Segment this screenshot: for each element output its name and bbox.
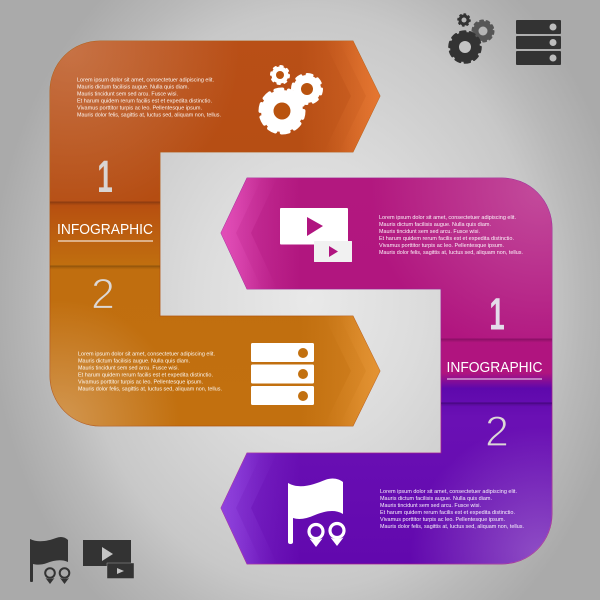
text block: lower orange: Et harum quidem rerum facilis est et expedita distinctio.	[78, 372, 213, 378]
icon: white server stack	[251, 343, 314, 405]
number 1: 1	[97, 151, 113, 202]
icon: dark server stack	[516, 20, 561, 65]
text block: magenta	[379, 215, 523, 256]
icon: dark video screens	[83, 540, 134, 578]
number 1: 1	[489, 289, 505, 339]
text block: lower orange: Lorem ipsum dolor sit amet, consectetuer adipiscing elit.	[78, 352, 215, 358]
text block: lower orange	[78, 352, 222, 392]
ribbon shape	[50, 41, 380, 426]
panel: orange S-shaped ribbon	[50, 41, 380, 426]
ribbon shape	[221, 178, 552, 564]
text block: lower orange: Mauris dictum facilisis augue. Nulla quis diam.	[78, 358, 190, 364]
text block: upper orange: Vivamus porttitor turpis ac leo. Pellentesque ipsum.	[77, 106, 202, 112]
heading underline	[58, 240, 153, 242]
text block: magenta: Mauris tincidunt sem sed arcu. Fusce wisi.	[379, 229, 480, 235]
icon: dark gears	[450, 14, 494, 62]
icon: dark flag and map pins	[30, 537, 69, 584]
heading underline	[447, 378, 542, 380]
heading: INFOGRAPHIC	[57, 221, 153, 238]
lower arrow chevrons	[221, 453, 300, 564]
text block: lower orange: Vivamus porttitor turpis ac leo. Pellentesque ipsum.	[78, 380, 203, 386]
fold dividers	[50, 202, 160, 270]
text block: purple: Vivamus porttitor turpis ac leo. Pellentesque ipsum.	[380, 517, 505, 523]
icon: white gears	[260, 66, 322, 132]
number 2: 2	[485, 408, 509, 456]
panel: magenta and purple S-shaped ribbon	[221, 178, 552, 564]
text block: magenta: Mauris dictum facilisis augue. Nulla quis diam.	[379, 222, 491, 228]
text block: upper orange: Mauris dictum facilisis augue. Nulla quis diam.	[77, 84, 189, 90]
heading: INFOGRAPHIC	[446, 359, 543, 376]
text block: lower orange: Mauris tincidunt sem sed arcu. Fusce wisi.	[78, 366, 179, 372]
text block: upper orange: Et harum quidem rerum facilis est et expedita distinctio.	[77, 98, 212, 104]
text block: purple	[380, 489, 524, 530]
text block: purple: Lorem ipsum dolor sit amet, consectetuer adipiscing elit.	[380, 489, 517, 495]
icon: white video screens	[280, 208, 352, 262]
text block: purple: Et harum quidem rerum facilis est et expedita distinctio.	[380, 510, 515, 516]
upper arrow chevrons	[300, 41, 380, 152]
text block: upper orange	[77, 78, 221, 118]
icon: white flag and map pins	[288, 479, 344, 547]
fold dividers	[441, 338, 552, 406]
lower arrow chevrons	[300, 316, 380, 426]
text block: purple: Mauris tincidunt sem sed arcu. Fusce wisi.	[380, 503, 481, 509]
text block: upper orange: Mauris tincidunt sem sed arcu. Fusce wisi.	[77, 92, 178, 98]
number 2: 2	[91, 270, 115, 318]
text block: purple: Mauris dolor felis, sagittis at, luctus sed, aliquam non, tellus.	[380, 524, 524, 530]
text block: magenta: Vivamus porttitor turpis ac leo. Pellentesque ipsum.	[379, 243, 504, 249]
upper arrow chevrons	[221, 178, 300, 289]
text block: lower orange: Mauris dolor felis, sagittis at, luctus sed, aliquam non, tellus.	[78, 386, 222, 392]
text block: purple: Mauris dictum facilisis augue. Nulla quis diam.	[380, 496, 492, 502]
text block: magenta: Et harum quidem rerum facilis est et expedita distinctio.	[379, 236, 514, 242]
text block: magenta: Lorem ipsum dolor sit amet, consectetuer adipiscing elit.	[379, 215, 516, 221]
text block: upper orange: Lorem ipsum dolor sit amet, consectetuer adipiscing elit.	[77, 78, 214, 84]
text block: upper orange: Mauris dolor felis, sagittis at, luctus sed, aliquam non, tellus.	[77, 112, 221, 118]
text block: magenta: Mauris dolor felis, sagittis at, luctus sed, aliquam non, tellus.	[379, 250, 523, 256]
